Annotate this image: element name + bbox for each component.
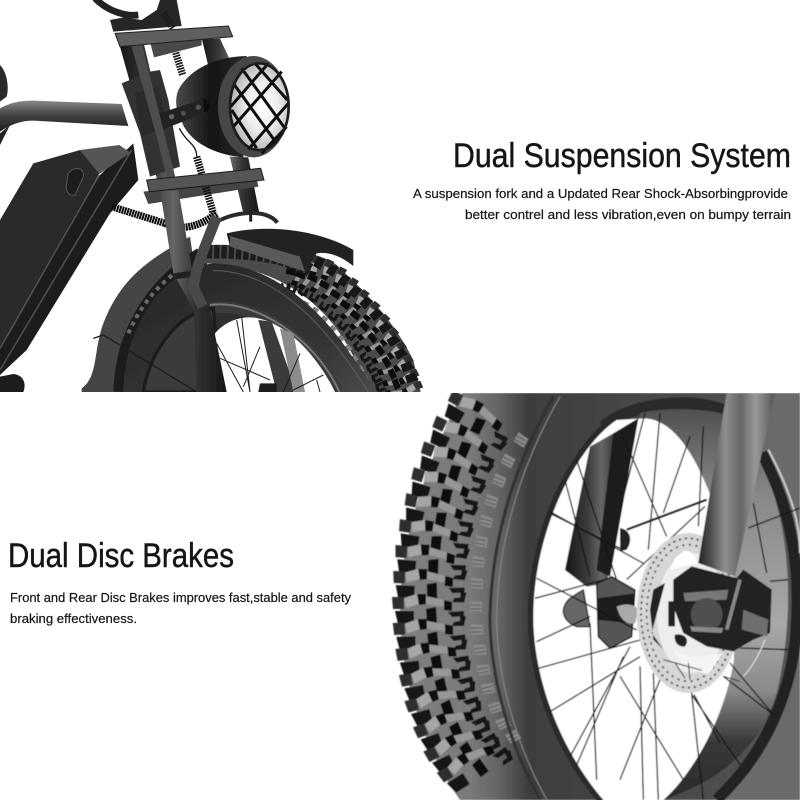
rim band [533, 420, 617, 800]
handlebar [95, 0, 138, 15]
brace under top tube [0, 125, 10, 145]
hub fragment [258, 383, 277, 392]
far fork leg [565, 418, 638, 587]
disc lower highlight [673, 650, 723, 675]
spokes: left side [535, 460, 643, 780]
brake caliper [673, 566, 772, 651]
rim left of fork [143, 308, 220, 392]
front tyre sidewall [123, 263, 377, 392]
outer tyre at right [720, 393, 800, 800]
inner far sidewall [640, 409, 788, 800]
spokes: right side [620, 413, 800, 800]
fender stay arch [213, 213, 277, 224]
fender light strip [230, 236, 305, 272]
tread knobs [392, 387, 532, 798]
heading: dual disc brakes: Dual Disc Brakes [8, 537, 234, 575]
front fender [227, 229, 353, 272]
fender bolt [246, 207, 255, 222]
upper spring [172, 40, 183, 75]
headlight wiring [179, 128, 197, 157]
coiled brake cable [112, 207, 217, 227]
seat edge [0, 65, 8, 102]
dark tread under fender [207, 252, 310, 270]
far rim light line [768, 450, 800, 553]
headlight [176, 56, 289, 157]
lower fork crown [147, 168, 264, 192]
rim ring [210, 304, 339, 392]
text block: dual suspension system [413, 137, 791, 222]
lower crown backing plate [143, 178, 258, 204]
lower frame and battery carrier [0, 143, 138, 375]
thick spoke [627, 500, 707, 530]
text block: dual disc brakes [8, 537, 351, 626]
fork sleeve clamp [144, 89, 162, 129]
upper fork crown [115, 26, 233, 47]
battery pack [0, 145, 132, 370]
wheel opening [533, 418, 734, 800]
thin wire [743, 640, 765, 676]
hub [563, 577, 638, 648]
far fork highlight [280, 328, 305, 392]
stem [110, 0, 182, 32]
panel: front wheel and disc brake photo [392, 387, 800, 800]
description: suspension line one: A suspension fork and a Updated Rear Shock-Absorbingprovide [413, 186, 788, 201]
description: suspension line two: better contrel and less vibration,even on bumpy terrain [465, 207, 791, 222]
top rim band [603, 403, 723, 427]
far fork leg [258, 320, 297, 392]
tread knobs: left side [128, 272, 177, 333]
sidewall highlight line [213, 271, 368, 392]
top spring [163, 13, 173, 28]
front tyre tread base [200, 245, 421, 392]
far fork shadow [597, 418, 638, 577]
brake disc [637, 533, 740, 693]
tyre body [400, 393, 800, 800]
rear fork tube [202, 39, 259, 213]
tyre tread: left side [125, 258, 203, 392]
fork sleeve [122, 70, 180, 177]
mudguard stay [93, 335, 197, 392]
description: brakes line one: Front and Rear Disc Brakes improves fast,stable and safety [10, 590, 351, 605]
fork collar [174, 270, 191, 279]
upper crown backing plate [150, 39, 202, 57]
spokes over disc [663, 660, 740, 681]
wheel opening [215, 317, 335, 392]
spokes [217, 317, 323, 392]
description: brakes line two: braking effectiveness. [10, 611, 137, 626]
headlight bracket [159, 98, 211, 129]
fender stay strap [193, 217, 217, 307]
fork tube over sleeve [132, 43, 178, 192]
pedal fragment [0, 374, 25, 392]
top tube [0, 101, 128, 132]
sidewall groove [490, 397, 553, 799]
far rim band [717, 453, 797, 800]
rim shadow band [210, 307, 337, 392]
rear mudguard [82, 236, 192, 392]
tread knobs: top arc [281, 256, 424, 392]
panel: front suspension photo [0, 0, 424, 407]
fork lower leg [698, 393, 775, 576]
hub end [620, 528, 630, 551]
lower spring [197, 157, 213, 213]
main fork tube [120, 42, 227, 392]
sidewall groove highlight [497, 397, 560, 799]
